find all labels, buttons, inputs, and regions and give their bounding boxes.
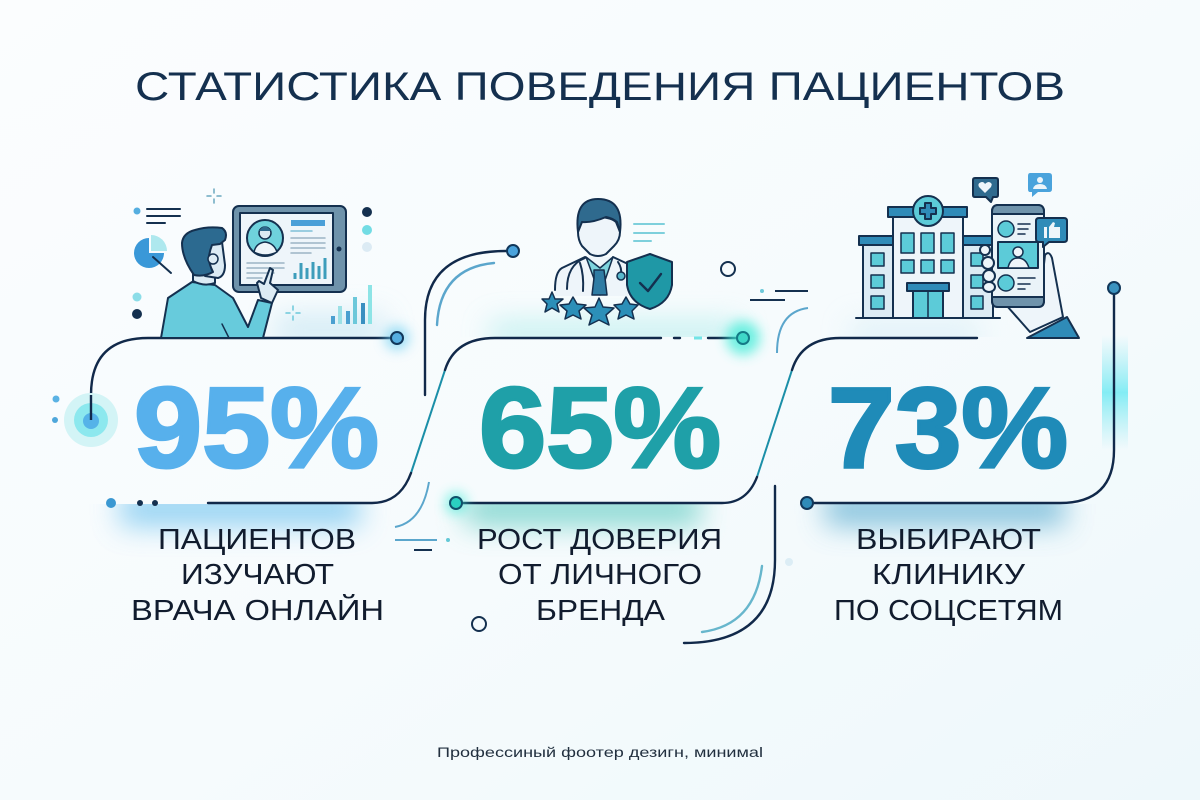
connector: card frame 1 bbox=[91, 251, 506, 503]
phone bbox=[992, 205, 1044, 307]
label: trust growth: РОСТ ДОВЕРИЯ bbox=[477, 524, 722, 556]
connector: card frame 3 bbox=[792, 294, 1114, 503]
node: target pulse left bbox=[52, 393, 118, 447]
coat bbox=[555, 257, 628, 296]
icon: person with tablet bbox=[132, 189, 372, 338]
person bbox=[161, 227, 278, 338]
label: choose clinic by social: ПО СОЦСЕТЯМ bbox=[834, 595, 1063, 627]
label: trust growth: ОТ ЛИЧНОГО bbox=[498, 559, 702, 591]
head bbox=[578, 217, 620, 256]
label: trust growth: БРЕНДА bbox=[536, 595, 666, 627]
hand back bbox=[1007, 253, 1063, 332]
bubble: heart bbox=[973, 178, 998, 202]
footer: Профессиный фоотер дезигн, минимаl bbox=[437, 744, 763, 760]
node: right vertical bbox=[1108, 282, 1120, 294]
tablet bbox=[233, 206, 346, 292]
label: choose clinic by social bbox=[834, 524, 1063, 627]
bubble: like bbox=[1036, 218, 1067, 247]
node: teal bottom bbox=[445, 492, 467, 514]
decorative dots and dashes bbox=[106, 262, 808, 631]
connector: card frame 2 bbox=[445, 338, 775, 643]
node: blue top right bbox=[385, 326, 409, 350]
label: patients study doctor online: ИЗУЧАЮТ bbox=[181, 559, 334, 591]
label: choose clinic by social: КЛИНИКУ bbox=[872, 559, 1026, 591]
bubble: profile bbox=[1028, 173, 1052, 197]
hospital bbox=[856, 196, 1000, 318]
label: patients study doctor online: ПАЦИЕНТОВ bbox=[158, 524, 356, 556]
label: trust growth bbox=[477, 524, 722, 627]
connector: teal diagonal links bbox=[411, 370, 792, 477]
title: СТАТИСТИКА ПОВЕДЕНИЯ ПАЦИЕНТОВ bbox=[135, 65, 1065, 109]
label: choose clinic by social: ВЫБИРАЮТ bbox=[856, 524, 1041, 556]
cuff bbox=[1027, 317, 1079, 338]
icon: doctor with shield and stars bbox=[542, 199, 672, 325]
label: patients study doctor online: ВРАЧА ОНЛАЙН bbox=[131, 593, 384, 627]
node: teal glow bbox=[694, 321, 760, 355]
icon: hospital and phone bbox=[856, 173, 1079, 338]
node: blue bottom bbox=[801, 497, 813, 509]
node: arc end bbox=[507, 245, 519, 257]
fingers bbox=[980, 245, 995, 292]
label: patients study doctor online bbox=[131, 524, 384, 627]
big number: 65%: 65% bbox=[479, 365, 721, 492]
big number: 73%: 73% bbox=[828, 365, 1068, 492]
big number: 95%: 95% bbox=[134, 365, 379, 492]
glow around connector lines bbox=[120, 315, 1128, 526]
doc lines + pie bbox=[132, 189, 372, 324]
